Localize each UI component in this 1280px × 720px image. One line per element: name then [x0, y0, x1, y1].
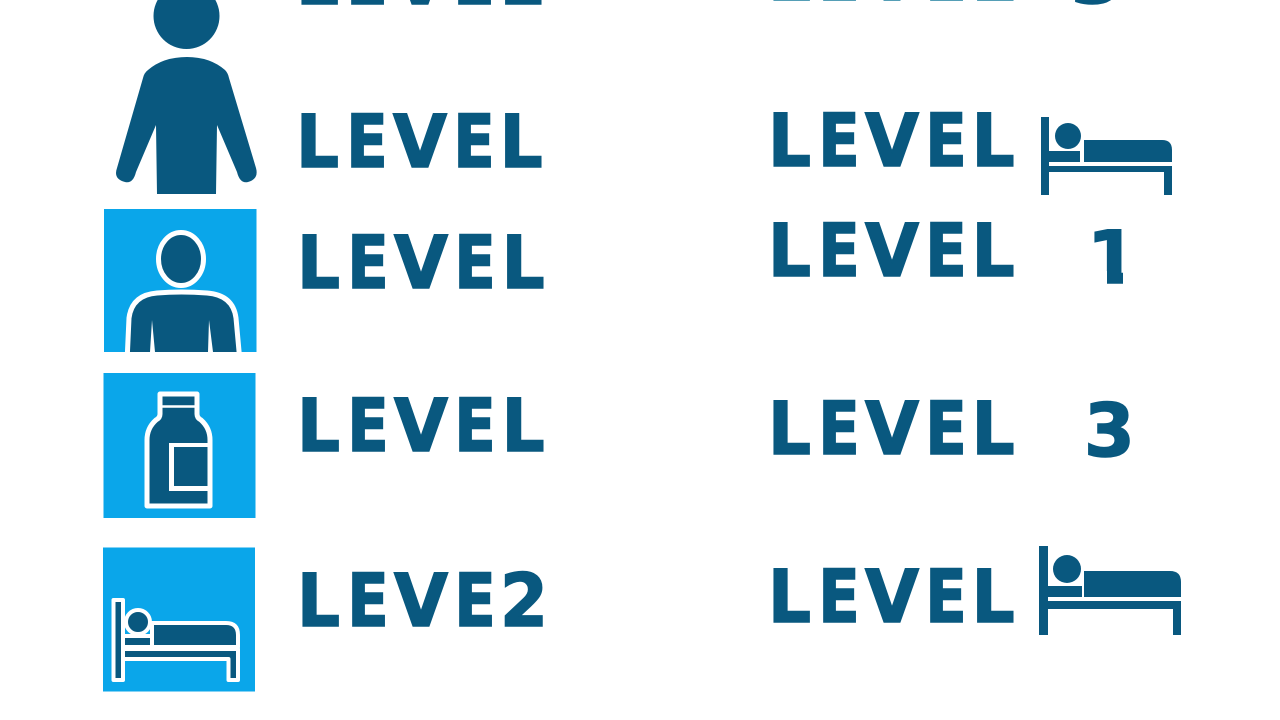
label: level row two left: L	[500, 100, 543, 185]
label: level 1 text: E	[925, 209, 967, 294]
label: digit 3: 3	[1084, 389, 1135, 474]
label: digit 1: 1	[1087, 216, 1138, 301]
label: level 3 text: E	[925, 387, 967, 472]
label: level row three left: E	[454, 221, 496, 306]
label: level 3 text: E	[818, 387, 860, 472]
label: level row two left: E	[453, 100, 495, 185]
panel: person level	[100, 209, 260, 366]
icon: bed small	[1041, 117, 1172, 195]
label: level row two right: E	[818, 99, 860, 184]
label: level row two left: E	[346, 100, 388, 185]
label: level row five right: E	[925, 555, 967, 640]
label: level row four left: V	[394, 384, 448, 469]
label: level row five right: E	[818, 555, 860, 640]
label: level 2 left: V	[394, 559, 448, 644]
label: digit 1	[1070, 216, 1150, 301]
label: level row two right: L	[768, 99, 811, 184]
panel: hospital bed level	[103, 548, 255, 692]
label: level row three left: E	[347, 221, 389, 306]
label: level row two left: L	[296, 100, 339, 185]
label: level 2 left: E	[347, 559, 389, 644]
label: level 2 left: E	[454, 559, 496, 644]
label: level 3 text: L	[972, 387, 1015, 472]
label: level 2 left: 2	[500, 559, 548, 644]
label: level row five right: V	[865, 555, 919, 640]
label: level 1 text: E	[818, 209, 860, 294]
label: level row two left: V	[393, 100, 447, 185]
label: level 1 text: L	[768, 209, 811, 294]
label: level row two right: V	[865, 99, 919, 184]
label: level 3 text: V	[865, 387, 919, 472]
label: level row four left: L	[502, 384, 545, 469]
label: level row four left: L	[297, 384, 340, 469]
label: level row five right: L	[972, 555, 1015, 640]
icon: standing person	[116, 0, 257, 194]
label: level row two right: E	[925, 99, 967, 184]
label: level row four left: E	[454, 384, 496, 469]
label: level 1 text: L	[972, 209, 1015, 294]
label: level row three left: L	[297, 221, 340, 306]
icon: bed large	[1039, 546, 1181, 635]
label: level 2 left: L	[297, 559, 340, 644]
panel: medicine bottle level	[104, 373, 256, 518]
label: level 1 text: V	[865, 209, 919, 294]
label: level row two right: L	[972, 99, 1015, 184]
label: level row four left: E	[347, 384, 389, 469]
label: level row three left: V	[394, 221, 448, 306]
label: level row five right: L	[768, 555, 811, 640]
label: level row three left: L	[502, 221, 545, 306]
label: level 3 text: L	[768, 387, 811, 472]
